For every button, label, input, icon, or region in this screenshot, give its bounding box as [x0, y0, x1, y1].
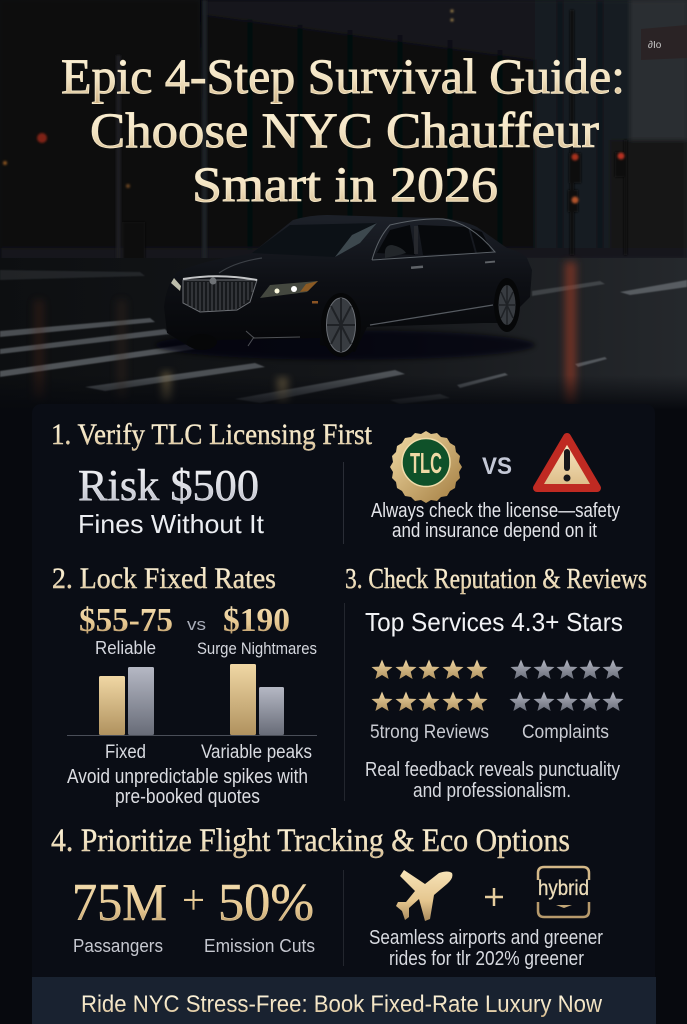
- main dark panel: [32, 404, 655, 1024]
- wet road: [0, 258, 687, 410]
- vs label: vs: [187, 615, 206, 634]
- bar chart: Fixed: [105, 742, 146, 763]
- star labels: Complaints: [522, 722, 609, 743]
- bar chart: [67, 664, 317, 763]
- note: [365, 759, 620, 802]
- plus: [485, 888, 503, 906]
- city buildings: [0, 0, 687, 260]
- stat captions: [73, 936, 315, 956]
- note: pre-booked quotes: [115, 786, 260, 808]
- note: Avoid unpredictable spikes with: [67, 766, 308, 788]
- note: [369, 927, 603, 970]
- labels: [95, 638, 317, 658]
- mirror: [385, 245, 406, 258]
- crosswalk stripes: [0, 270, 687, 404]
- traffic lights: [3, 10, 624, 204]
- note: Seamless airports and greener: [369, 927, 603, 949]
- grille: [183, 280, 257, 312]
- icon: hybrid badge: hybrid: [538, 877, 589, 900]
- heading 4: 4. Prioritize Flight Tracking & Eco Options: [51, 823, 570, 859]
- note: rides for tlr 202% greener: [389, 948, 584, 970]
- wheels: [326, 293, 356, 357]
- note: [371, 500, 620, 542]
- car body: [164, 215, 532, 352]
- note: and insurance depend on it: [392, 520, 597, 542]
- plus: +: [182, 878, 205, 924]
- call to action bar: [32, 977, 656, 1024]
- section 4: flight tracking and eco: [51, 823, 603, 970]
- price: fixed: $55-75: [79, 602, 173, 639]
- note: and professionalism.: [413, 780, 571, 802]
- light reflections: [565, 262, 576, 407]
- stat: risk $500: Risk $500: [78, 461, 259, 510]
- divider: [343, 870, 344, 966]
- section 2: lock fixed rates: [52, 562, 317, 808]
- divider: [344, 603, 345, 801]
- street poles: [116, 0, 627, 262]
- icon: TLC gold badge: TLC: [410, 448, 442, 480]
- title: [61, 48, 625, 212]
- star labels: [370, 722, 609, 743]
- vs label: VS: [482, 453, 512, 480]
- labels: Surge Nightmares: [197, 639, 317, 658]
- icon: hybrid badge: [538, 867, 589, 917]
- stat: 50%: 50%: [218, 874, 314, 932]
- limousine: [155, 215, 535, 360]
- title: Epic 4-Step Survival Guide:: [61, 48, 625, 104]
- stat caption: Fines Without It: [78, 509, 265, 539]
- section 3: check reputation: [345, 564, 647, 802]
- stat: 75M: 75M: [72, 874, 167, 932]
- star labels: 5trong Reviews: [370, 722, 489, 743]
- icon: airplane: [396, 870, 452, 921]
- road sign: ∂Io: [648, 40, 662, 51]
- icon: TLC gold badge: [390, 431, 462, 503]
- call to action bar: Ride NYC Stress-Free: Book Fixed-Rate Luxury Now: [81, 991, 603, 1018]
- bar chart: Variable peaks: [201, 742, 312, 763]
- labels: Reliable: [95, 638, 156, 658]
- note: Always check the license—safety: [371, 500, 620, 522]
- stat captions: Passangers: [73, 936, 163, 956]
- gold star rows: [372, 660, 488, 711]
- title: Smart in 2026: [192, 156, 498, 212]
- divider: [343, 462, 344, 544]
- stat captions: Emission Cuts: [204, 936, 315, 956]
- section 1: verify TLC licensing: [51, 418, 620, 544]
- title: Choose NYC Chauffeur: [90, 102, 599, 158]
- side windows: [377, 225, 415, 255]
- icon: warning triangle: [537, 437, 597, 488]
- note: [67, 766, 308, 808]
- stat: top services: Top Services 4.3+ Stars: [365, 607, 623, 637]
- chrome trim: [372, 219, 495, 260]
- background photo: rainy NYC street: [0, 0, 687, 410]
- price: surge: $190: [223, 602, 290, 639]
- heading 1: 1. Verify TLC Licensing First: [51, 418, 373, 451]
- note: Real feedback reveals punctuality: [365, 759, 620, 781]
- silver star rows: [510, 660, 624, 711]
- windshield: [252, 223, 377, 257]
- road sign: [641, 25, 687, 60]
- heading 2: 2. Lock Fixed Rates: [52, 562, 276, 595]
- headlights: [260, 281, 318, 298]
